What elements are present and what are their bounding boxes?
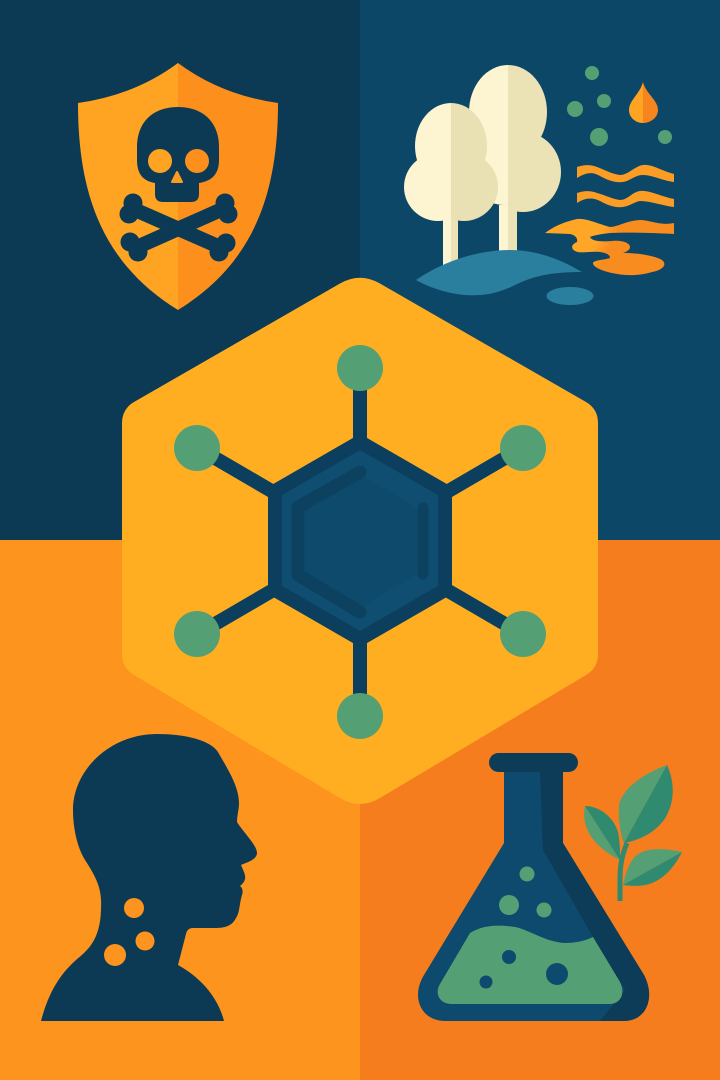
skull left eye [148, 149, 172, 173]
stem [620, 843, 627, 901]
crossbones [120, 194, 238, 262]
panel: bottom-right background [360, 540, 720, 1080]
icon: flask [418, 753, 649, 1021]
back tree trunk [499, 205, 517, 253]
benzene ring [275, 442, 445, 639]
ring inner double bond right [418, 508, 428, 574]
front tree trunk [443, 210, 458, 266]
ring inner double bond left [298, 472, 360, 612]
skull [137, 107, 219, 202]
shield right half [178, 63, 278, 310]
neck node lower [104, 944, 126, 966]
neck node upper [124, 898, 144, 918]
icon: shield with skull and crossbones [78, 63, 278, 310]
bubbles in liquid [480, 950, 568, 988]
left leaf [584, 806, 620, 860]
icon: pollution particles [567, 66, 672, 146]
molecule atoms [174, 345, 546, 739]
icon: plant sprig [584, 765, 682, 901]
skull nose [172, 172, 182, 182]
skull right eye [185, 149, 209, 173]
panel: top-left background [0, 0, 360, 540]
molecule bonds [215, 385, 505, 700]
neck node middle [136, 932, 154, 950]
icon: human head with neck nodes [41, 734, 257, 1021]
top leaf [619, 765, 673, 843]
panel: top-right background [360, 0, 720, 540]
pond [546, 287, 594, 305]
shield left half [78, 63, 178, 310]
back tree crown [465, 65, 561, 212]
panel: bottom-left background [0, 540, 360, 1080]
icon: polluted water waves [577, 165, 674, 207]
right leaf [623, 849, 682, 886]
flask lip [489, 753, 578, 772]
central hexagon [122, 278, 598, 804]
flask shaded side [540, 770, 649, 1021]
icon: droplet [629, 82, 658, 123]
head silhouette [41, 734, 257, 1021]
front tree crown [404, 103, 498, 221]
flask liquid [438, 926, 622, 1004]
icon: trees on a hill [404, 65, 594, 305]
icon: polluted river [545, 219, 674, 275]
bubbles above liquid [499, 866, 552, 918]
ring inner hexagon [305, 474, 417, 608]
flask body [418, 770, 649, 1021]
molecule diagram [174, 345, 546, 739]
hill [416, 250, 582, 295]
